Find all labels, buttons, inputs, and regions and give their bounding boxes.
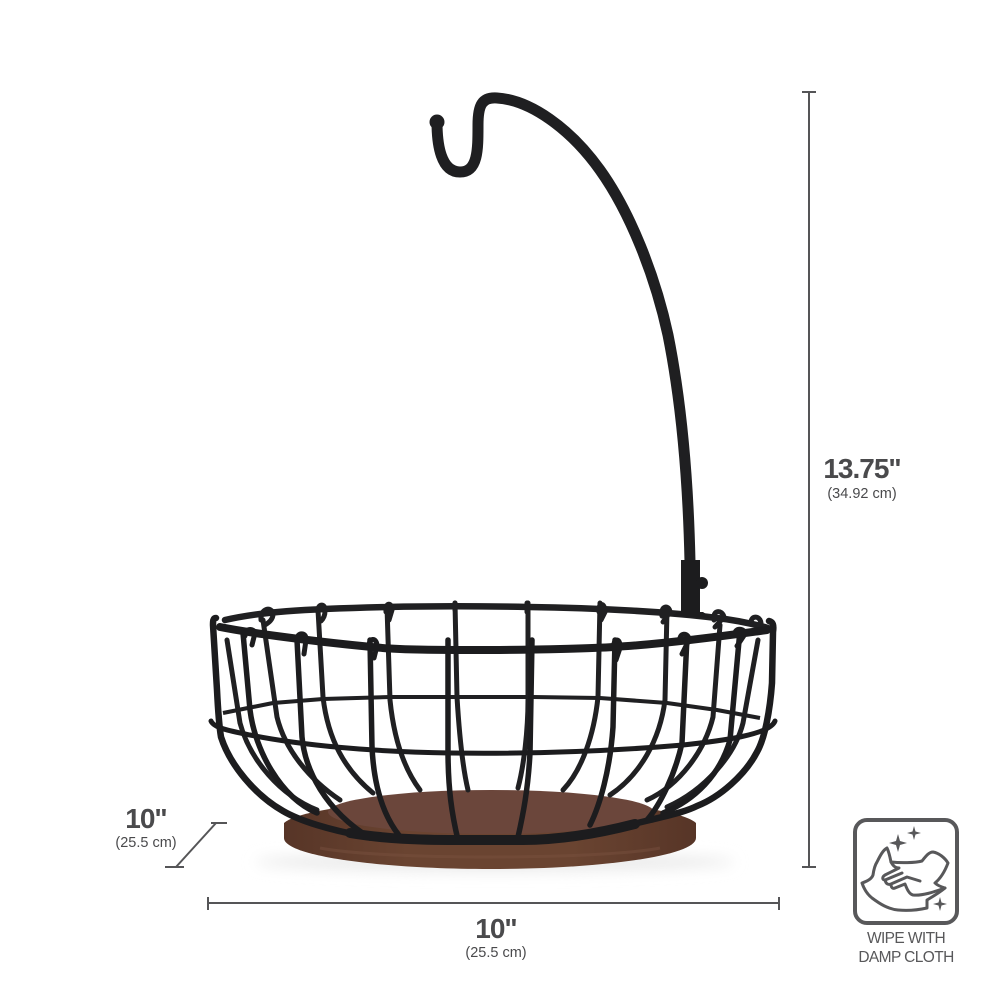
product: wire fruit basket with banana hook (211, 98, 775, 869)
front wires (243, 630, 740, 840)
front middle ring (211, 721, 775, 753)
depth dimension line (165, 823, 227, 867)
height label (823, 453, 901, 502)
back middle ring (223, 697, 760, 718)
care instruction text (858, 930, 954, 966)
front rim (220, 627, 767, 650)
floor shadow (255, 852, 735, 872)
depth label: (25.5 cm) (115, 835, 177, 851)
height label: 13.75" (823, 453, 901, 484)
depth label (115, 803, 177, 851)
back rim clips (261, 603, 761, 627)
width dimension line (208, 897, 779, 910)
width label (465, 913, 527, 961)
height dimension line (802, 92, 816, 867)
icon: wipe with damp cloth (855, 820, 957, 923)
sparkles (889, 826, 947, 911)
hook tip (430, 114, 444, 130)
front rim clips (245, 629, 745, 660)
wooden base (284, 790, 696, 869)
back rim (225, 606, 768, 628)
bowl outer edge (213, 618, 773, 840)
care instruction text: DAMP CLOTH (858, 949, 954, 966)
hook collar and bolt (672, 560, 712, 618)
back wires (227, 603, 758, 810)
width label: 10" (475, 913, 517, 944)
care instruction text: WIPE WITH (867, 930, 945, 947)
hook arm (437, 98, 690, 562)
bottom ring (350, 824, 635, 840)
height label: (34.92 cm) (827, 486, 897, 502)
depth label: 10" (125, 803, 167, 834)
width label: (25.5 cm) (465, 945, 527, 961)
